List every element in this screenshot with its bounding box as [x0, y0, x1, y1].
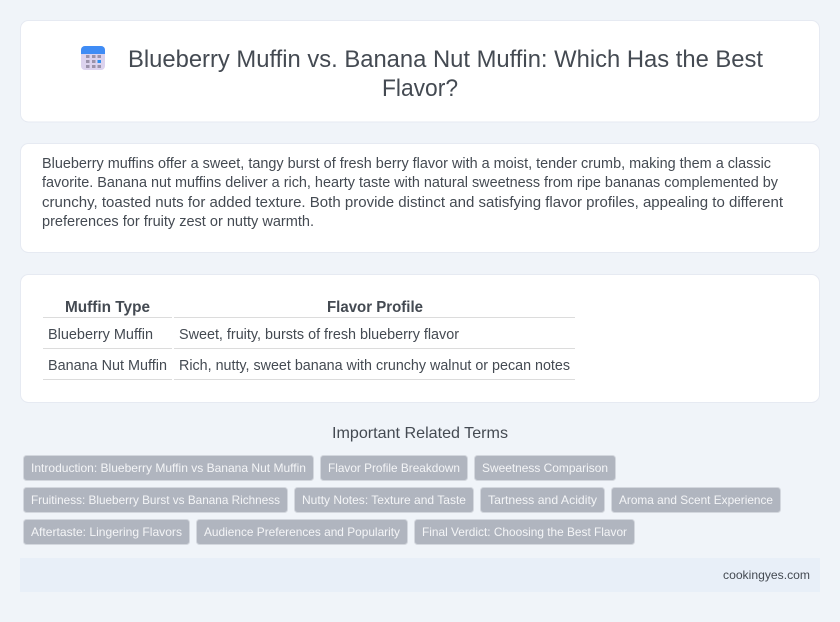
footer — [20, 558, 820, 592]
tag: Final Verdict: Choosing the Best Flavor — [422, 525, 627, 539]
title: Flavor? — [382, 75, 458, 102]
tag — [320, 456, 468, 480]
table row: blueberry muffin — [43, 327, 575, 349]
tag: Flavor Profile Breakdown — [328, 461, 460, 475]
tag: Sweetness Comparison — [482, 461, 608, 475]
tag — [24, 456, 314, 480]
tag: Introduction: Blueberry Muffin vs Banana Nut Muffin — [31, 461, 306, 475]
tag: Audience Preferences and Popularity — [204, 525, 400, 539]
tag: Aroma and Scent Experience — [619, 493, 773, 507]
tag list: related terms — [24, 456, 780, 544]
text block: intro — [42, 156, 783, 230]
tag: Aftertaste: Lingering Flavors — [31, 525, 182, 539]
text block: intro: crunchy, toasted nuts for added texture. Both provide distinct and satisfying flavor profiles, appealing to different — [42, 195, 783, 211]
tag — [474, 456, 616, 480]
tag: Fruitiness: Blueberry Burst vs Banana Richness — [31, 493, 280, 507]
table row: banana nut muffin — [43, 358, 575, 380]
tag — [24, 520, 190, 544]
tag — [294, 488, 474, 512]
tag — [612, 488, 780, 512]
heading: related terms: Important Related Terms — [332, 425, 508, 442]
tag — [24, 488, 288, 512]
tag — [480, 488, 604, 512]
table header: Muffin Type — [65, 299, 150, 316]
text block: intro: favorite. Banana nut muffins deliver a rich, hearty taste with natural sweetness from ripe bananas complemented by — [42, 175, 779, 191]
table row: blueberry muffin: Blueberry Muffin — [48, 327, 153, 343]
table row: banana nut muffin: Rich, nutty, sweet banana with crunchy walnut or pecan notes — [179, 358, 570, 374]
text block: intro: preferences for fruity zest or nutty warmth. — [42, 214, 314, 230]
title: Blueberry Muffin vs. Banana Nut Muffin: Which Has the Best — [128, 46, 763, 73]
title — [128, 46, 763, 102]
footer source text: cookingyes.com — [723, 568, 810, 582]
text block: intro: Blueberry muffins offer a sweet, tangy burst of fresh berry flavor with a moist, tender crumb, making them a classic — [42, 156, 771, 172]
table header — [43, 299, 575, 318]
table row: banana nut muffin: Banana Nut Muffin — [48, 358, 167, 374]
tag — [414, 520, 634, 544]
tag: Tartness and Acidity — [488, 493, 597, 507]
panel: title header — [20, 20, 820, 122]
table row: blueberry muffin: Sweet, fruity, bursts of fresh blueberry flavor — [179, 327, 459, 343]
tag: Nutty Notes: Texture and Taste — [302, 493, 466, 507]
panel: comparison table — [20, 274, 820, 402]
tag — [196, 520, 408, 544]
panel: intro paragraph — [20, 144, 820, 252]
icon: calendar — [81, 46, 105, 70]
table header: Flavor Profile — [327, 299, 423, 316]
